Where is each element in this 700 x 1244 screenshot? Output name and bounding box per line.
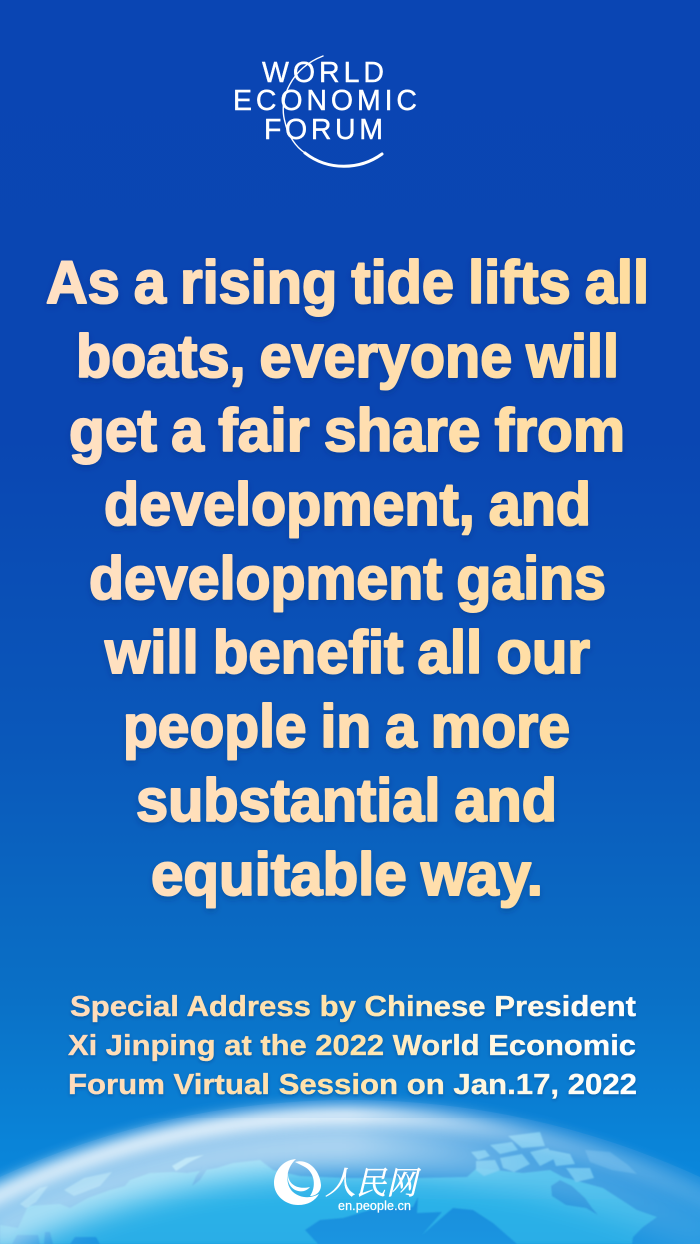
globe with continents and atmosphere glow: [0, 1100, 700, 1244]
logo wordmark: FORUM: [264, 114, 383, 146]
logo wordmark Chinese: 人民网: [325, 1158, 421, 1204]
main quote heading: people in a more: [123, 693, 570, 760]
Greenland: [585, 1150, 637, 1174]
main quote heading: will benefit all our: [104, 619, 590, 686]
main quote heading: equitable way.: [151, 841, 543, 908]
source caption: Xi Jinping at the 2022 World Economic: [68, 1030, 636, 1062]
logo wordmark: ECONOMIC: [233, 85, 417, 117]
logo emblem: [274, 1159, 321, 1205]
arctic islands: [471, 1132, 594, 1182]
logo url: en.people.cn: [338, 1199, 411, 1213]
Hudson Bay: [551, 1180, 598, 1215]
logo arc: [283, 56, 382, 166]
Europe light land: [64, 1172, 112, 1196]
land mass: [0, 1160, 657, 1244]
main quote heading: [46, 249, 649, 908]
logo: World Economic Forum: [233, 56, 417, 166]
source caption: Forum Virtual Session on Jan.17, 2022: [68, 1069, 637, 1101]
main quote heading: get a fair share from: [69, 397, 625, 464]
source caption: Special Address by Chinese President: [70, 991, 636, 1023]
logo: People's Daily Online: [274, 1158, 421, 1213]
main quote heading: substantial and: [136, 767, 557, 834]
main quote heading: development, and: [104, 471, 591, 538]
atmosphere soft inner glow: [0, 1116, 700, 1238]
logo wordmark: [233, 57, 417, 146]
logo wordmark: WORLD: [262, 57, 384, 89]
main quote heading: boats, everyone will: [76, 323, 619, 390]
main quote heading: development gains: [89, 545, 606, 612]
main quote heading: As a rising tide lifts all: [46, 249, 649, 316]
source caption: [68, 991, 637, 1101]
